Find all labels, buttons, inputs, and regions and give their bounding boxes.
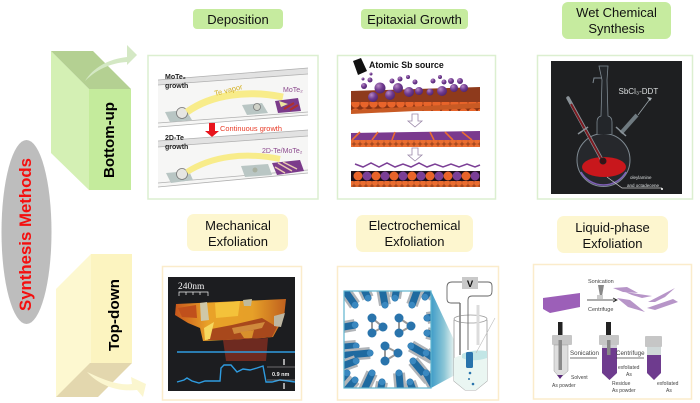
layer: intermediate xyxy=(351,131,480,147)
panel: Deposition xyxy=(148,56,318,199)
arrow: continuous growth: Continuous growth xyxy=(220,124,282,133)
heading: Mechanical Exfoliation: Exfoliation xyxy=(208,234,268,249)
tube: MoTe2 growth xyxy=(158,68,308,127)
heading: Liquid-phase Exfoliation xyxy=(557,216,668,253)
electrochemical cell xyxy=(447,277,495,390)
AFM image: 0.9 nm xyxy=(272,372,290,378)
block: Top-down xyxy=(56,254,146,397)
photo: flask on dark background: oleylamine xyxy=(630,175,652,180)
tube: 2D-Te growth: 2D-Te xyxy=(165,135,184,142)
photo: flask on dark background: and octadecene xyxy=(627,183,660,188)
heading: Wet Chemical Synthesis xyxy=(562,2,671,39)
tube: 2D-Te growth: 2D-Te/MoTe₂ xyxy=(262,148,303,155)
tube: exfoliated: Residue xyxy=(612,381,631,387)
photo: flask on dark background: SbCl₃-DDT xyxy=(618,87,658,96)
heading: Liquid-phase Exfoliation: Exfoliation xyxy=(583,236,642,251)
tube: centrifuged xyxy=(645,336,679,394)
arrow: step two xyxy=(408,148,422,161)
label: Centrifuge arrow: Centrifuge xyxy=(616,350,645,357)
outline of crystal inset xyxy=(344,291,431,388)
tube: centrifuged: exfoliated xyxy=(657,381,679,387)
heading: Wet Chemical Synthesis: Synthesis xyxy=(588,21,645,36)
arrow: bottom-up to panels xyxy=(85,45,137,81)
crystal structure inset xyxy=(344,292,430,388)
oval: Synthesis Methods: Synthesis Methods xyxy=(16,158,35,311)
oval: Synthesis Methods xyxy=(2,140,52,324)
bulk to flakes diagram: Centrifuge xyxy=(588,307,613,313)
icon: Sb source xyxy=(353,58,367,75)
arrow: step one xyxy=(408,114,422,127)
tube: solvent xyxy=(552,322,588,389)
panel: Wet Chemical Synthesis xyxy=(538,56,692,199)
heading: Epitaxial Growth: Epitaxial Growth xyxy=(367,12,462,27)
tube: exfoliated: As xyxy=(626,372,632,378)
panel: Mechanical Exfoliation xyxy=(162,266,302,400)
voltmeter: V xyxy=(467,279,474,290)
tube: MoTe2 growth: MoTe₂ xyxy=(165,74,186,81)
heading: Electrochemical Exfoliation: Exfoliation xyxy=(385,234,444,249)
heading: Epitaxial Growth xyxy=(361,9,468,29)
tube: MoTe2 growth: growth xyxy=(165,83,188,90)
tube: solvent: As powder xyxy=(552,383,576,389)
panel: Electrochemical Exfoliation xyxy=(326,266,498,403)
block: Bottom-up: Bottom-up xyxy=(101,102,118,178)
tube: exfoliated: As powder xyxy=(612,388,636,394)
tube: exfoliated: exfoliated xyxy=(618,365,640,371)
heading: Mechanical Exfoliation: Mechanical xyxy=(205,218,271,233)
arrow: top-down to panels xyxy=(87,372,146,397)
AFM image xyxy=(168,277,295,391)
tube: MoTe2 growth: MoTe₂ xyxy=(283,87,303,94)
label: Sonication arrow: Sonication xyxy=(570,350,599,357)
heading: Electrochemical Exfoliation xyxy=(356,215,473,252)
heading: Deposition: Deposition xyxy=(207,12,269,27)
layer: antimonene on substrate xyxy=(351,163,480,187)
heading: Liquid-phase Exfoliation: Liquid-phase xyxy=(575,220,650,235)
tube: solvent: Solvent xyxy=(571,375,588,381)
bulk to flakes diagram: Sonication xyxy=(588,279,614,285)
tube: 2D-Te growth: growth xyxy=(165,144,188,151)
panel: Liquid-phase Exfoliation xyxy=(534,264,692,399)
panel: Epitaxial Growth xyxy=(338,56,496,199)
zoom wedge xyxy=(431,291,455,388)
heading: Deposition xyxy=(193,9,283,29)
label: Atomic Sb source: Atomic Sb source xyxy=(369,60,444,70)
bulk to flakes diagram xyxy=(543,279,678,313)
tube: MoTe2 growth: Te vapor xyxy=(213,82,244,98)
block: Top-down: Top-down xyxy=(106,279,123,351)
photo: flask on dark background xyxy=(551,61,682,194)
heading: Electrochemical Exfoliation: Electrochemical xyxy=(369,218,460,233)
heading: Wet Chemical Synthesis: Wet Chemical xyxy=(576,5,657,20)
tube: centrifuged: As xyxy=(666,388,672,394)
block: Bottom-up xyxy=(51,45,137,190)
tube: exfoliated xyxy=(599,322,640,394)
tube: 2D-Te growth xyxy=(158,130,308,187)
heading: Mechanical Exfoliation xyxy=(187,214,288,251)
arrow: continuous growth xyxy=(205,123,282,137)
AFM image: 240nm xyxy=(178,282,205,292)
layer: substrate with Sb atoms xyxy=(351,72,480,114)
